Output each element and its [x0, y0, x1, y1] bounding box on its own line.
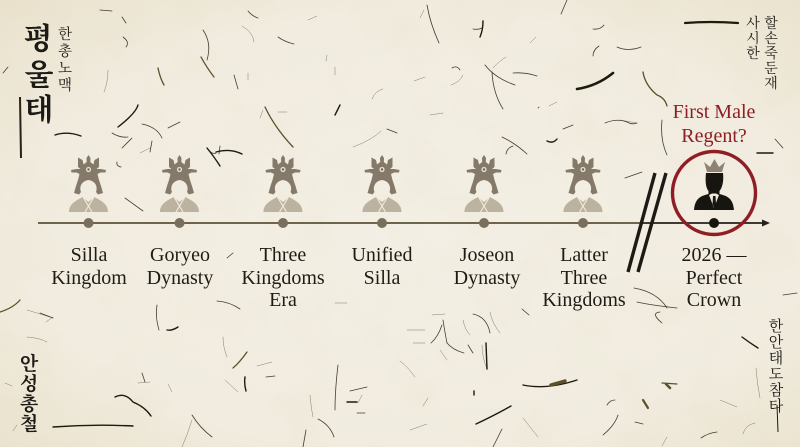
calligraphy: bottom right: 한	[769, 317, 784, 335]
calligraphy: bottom left: 성	[20, 372, 38, 395]
calligraphy: top right column one: 재	[764, 75, 778, 92]
callout: First Male Regent: First Male	[673, 101, 756, 123]
era marker: Goryeo Dynasty: Dynasty	[147, 267, 213, 289]
era marker: Silla Kingdom	[51, 155, 127, 289]
calligraphy: large title: 평	[24, 23, 52, 56]
calligraphy: top right column two: 사	[746, 15, 760, 32]
label: 2026 Perfect Crown: 2026 —	[682, 244, 748, 266]
label: 2026 Perfect Crown: Perfect	[686, 267, 743, 289]
shirt and tie	[709, 194, 719, 208]
calligraphy: bottom right: 태	[769, 349, 783, 367]
current marker dot	[709, 218, 719, 228]
callout: First Male Regent: Regent?	[681, 125, 747, 147]
era marker: Three Kingdoms Era: Kingdoms	[241, 267, 325, 289]
calligraphy: left small column: 맥	[58, 76, 72, 94]
era marker: Latter Three Kingdoms: Latter	[560, 244, 608, 266]
era marker: Joseon Dynasty	[454, 155, 520, 289]
era marker: Joseon Dynasty: Joseon	[460, 244, 514, 266]
era marker: Latter Three Kingdoms	[542, 155, 626, 311]
arrow head	[762, 220, 770, 226]
era marker: Silla Kingdom: Silla	[71, 244, 107, 266]
calligraphy: top right column two: 시	[746, 31, 760, 47]
calligraphy: bottom right: 타	[769, 397, 784, 415]
icon: crowned man in red circle	[672, 152, 756, 234]
calligraphy: bottom left: 총	[20, 393, 39, 415]
calligraphy: large title: 태	[25, 94, 53, 127]
calligraphy: bottom right: 안	[769, 333, 784, 351]
calligraphy: left small column: 노	[58, 61, 72, 77]
calligraphy: bottom right: 도	[769, 367, 784, 383]
calligraphy: left small column: 한	[58, 25, 72, 43]
era marker: Unified Silla: Unified	[351, 244, 413, 266]
era marker: Joseon Dynasty: Dynasty	[454, 267, 520, 289]
timeline break slashes	[628, 173, 666, 272]
calligraphy: top right column one: 죽	[764, 46, 778, 62]
crown	[704, 159, 725, 172]
era marker: Latter Three Kingdoms: Three	[561, 267, 607, 289]
calligraphy: top right column one: 할	[764, 15, 778, 32]
brush stroke beside title	[20, 97, 21, 158]
era marker: Three Kingdoms Era	[241, 155, 325, 311]
era marker: Goryeo Dynasty: Goryeo	[150, 244, 210, 266]
calligraphy: top right column one: 손	[764, 31, 778, 47]
calligraphy: top right column two: 한	[746, 45, 760, 62]
era marker: Goryeo Dynasty	[147, 155, 213, 289]
era marker: Three Kingdoms Era: Era	[269, 289, 297, 311]
head and shoulders	[694, 173, 734, 210]
calligraphy: bottom left: 철	[20, 412, 38, 435]
calligraphy: left small column: 총	[58, 43, 72, 60]
calligraphy: top right column one: 둔	[764, 62, 778, 77]
calligraphy: large title: 울	[25, 59, 54, 92]
era marker: Three Kingdoms Era: Three	[260, 244, 306, 266]
label: 2026 Perfect Crown: Crown	[687, 289, 741, 311]
calligraphy: bottom right	[769, 317, 784, 432]
timeline axis	[38, 220, 770, 226]
calligraphy: bottom left: 안	[20, 352, 39, 375]
era marker: Unified Silla	[351, 155, 413, 289]
era marker: Latter Three Kingdoms: Kingdoms	[542, 289, 626, 311]
era marker: Unified Silla: Silla	[364, 267, 400, 289]
era marker: Silla Kingdom: Kingdom	[51, 267, 127, 289]
calligraphy: bottom right: 참	[769, 381, 784, 399]
